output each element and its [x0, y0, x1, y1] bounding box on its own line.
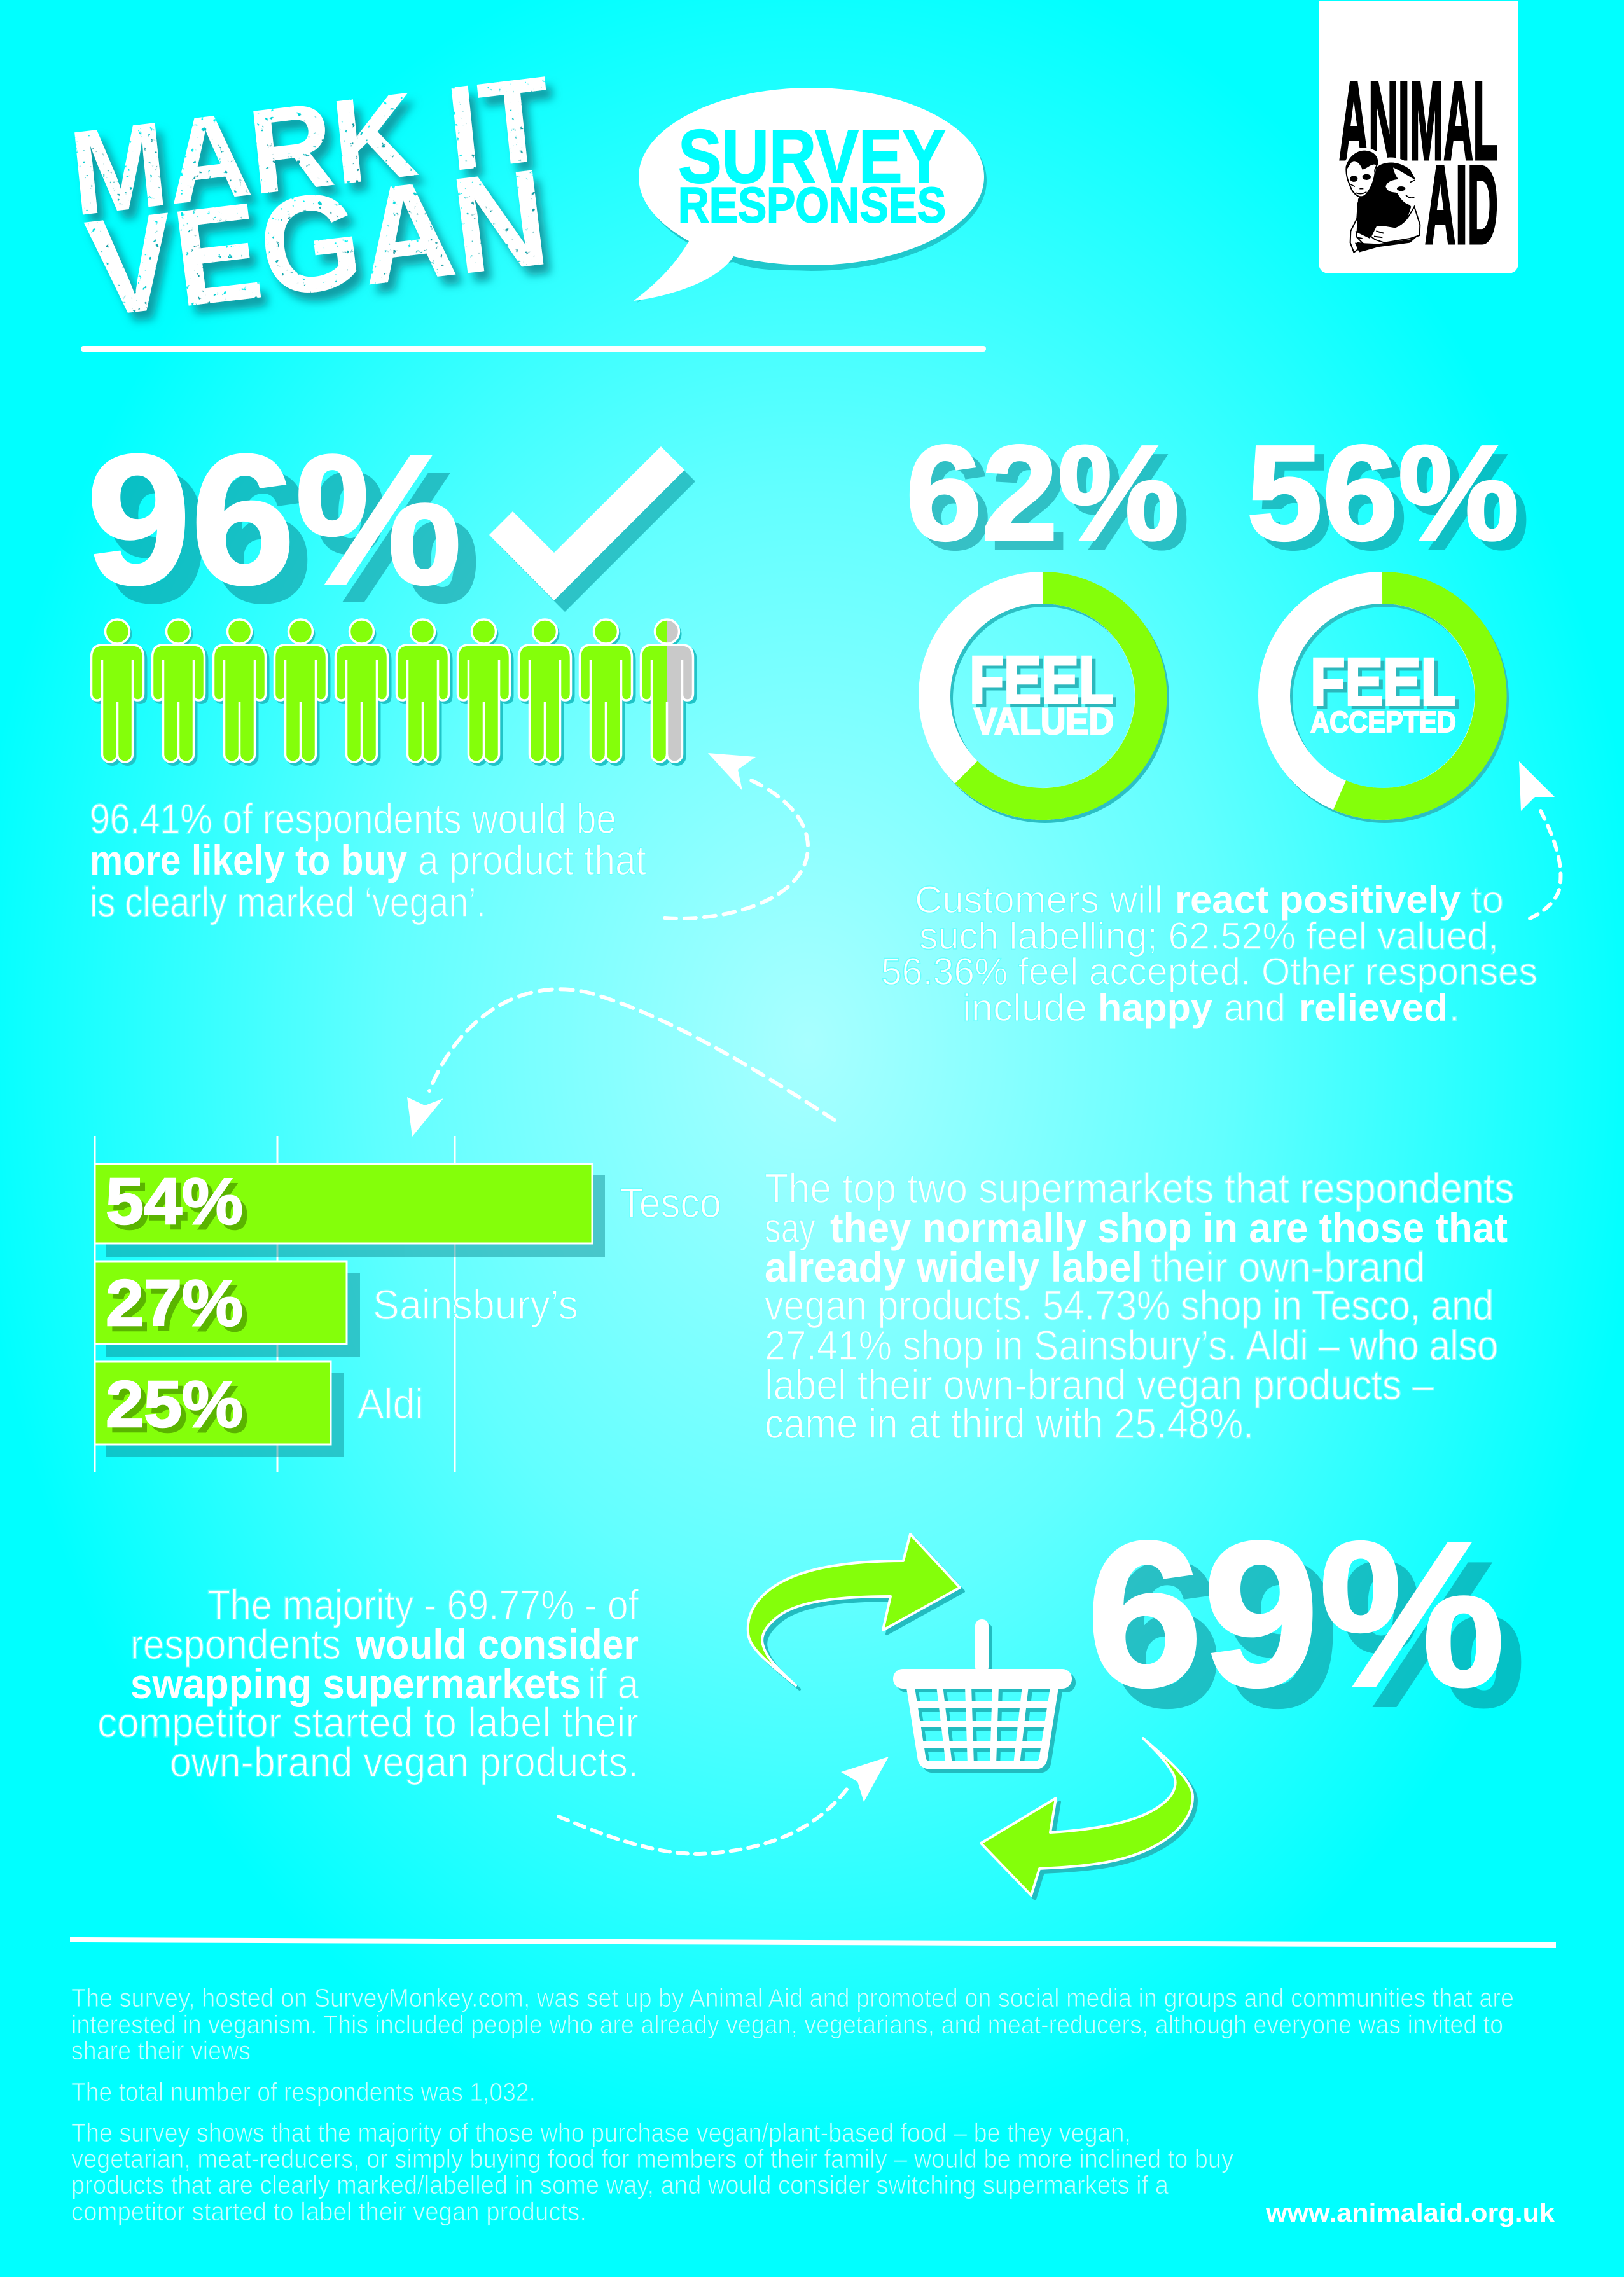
text: would consider swapping: would consider	[355, 1621, 639, 1668]
text: top two supermarkets: vegan products. 54.73% shop in Tesco, and	[765, 1282, 1494, 1329]
icon: tick	[489, 446, 695, 612]
bar labels	[357, 1179, 721, 1427]
donut: feel valued	[934, 588, 1153, 807]
text: would consider swapping: if a	[588, 1660, 639, 1707]
bar: Aldi	[95, 1362, 331, 1444]
footer notes: The survey, hosted on SurveyMonkey.com, was set up by Animal Aid and promoted on social media in groups and communities that are	[71, 1983, 1514, 2012]
footer notes: The survey shows that the majority of those who purchase vegan/plant-based food – be they vegan,	[71, 2118, 1131, 2147]
text: react positively: such labelling; 62.52% feel valued,	[919, 915, 1499, 957]
icon: green arrow up	[748, 1534, 960, 1685]
responses text: RESPONSES	[678, 177, 946, 233]
bar chart: supermarkets	[95, 1136, 721, 1472]
text: react positively	[881, 878, 1537, 1029]
title: Mark It Vegan: VEGAN	[80, 139, 555, 346]
text: react positively: happy	[1098, 986, 1213, 1029]
stat: 69%: 69%	[1086, 1498, 1505, 1729]
text: would consider swapping: own-brand vegan products.	[170, 1738, 639, 1785]
text: more likely to buy: a product that	[418, 836, 646, 883]
text: react positively: 56.36% feel accepted. Other responses	[881, 950, 1537, 993]
text: react positively: .	[1449, 986, 1460, 1029]
text: react positively: include	[962, 986, 1087, 1029]
text: top two supermarkets	[765, 1165, 1514, 1447]
title: Mark It Vegan: MARK IT	[64, 51, 557, 242]
bar labels: Aldi	[357, 1380, 424, 1427]
bar: Sainsbury's: 27%	[106, 1266, 243, 1339]
logo panel: Animal Aid	[1319, 1, 1518, 273]
website url: www.animalaid.org.uk	[1265, 2198, 1555, 2227]
text: top two supermarkets: The top two supermarkets that respondents	[765, 1165, 1514, 1212]
bar: Aldi: 25%	[106, 1367, 243, 1441]
footer notes	[71, 1983, 1514, 2226]
text: would consider swapping	[97, 1581, 639, 1785]
text: top two supermarkets: already widely label	[765, 1243, 1142, 1291]
text: would consider swapping: respondents	[130, 1621, 341, 1668]
text: top two supermarkets: they normally shop in are those that	[830, 1204, 1508, 1251]
icon: shopping basket	[893, 1619, 1072, 1765]
text: AID	[1425, 142, 1498, 266]
arrow: dashed to people	[665, 753, 808, 918]
footer notes: competitor started to label their vegan products.	[71, 2197, 586, 2226]
stat: 56%: 56%	[1247, 417, 1519, 568]
stat: 62%: 62%	[906, 417, 1179, 568]
footer notes: products that are clearly marked/labelled in some way, and would consider switching supermarkets if a	[71, 2170, 1169, 2199]
text: top two supermarkets: came in at third with 25.48%.	[765, 1400, 1254, 1447]
bar labels: Tesco	[620, 1179, 721, 1226]
bar: Tesco: 54%	[106, 1165, 243, 1238]
text: react positively: Customers will	[915, 878, 1163, 921]
footer notes: vegetarian, meat-reducers, or simply buying food for members of their family – would be more inclined to buy	[71, 2144, 1233, 2173]
donut label: FEEL	[1310, 645, 1455, 719]
text: would consider swapping: The majority - 69.77% - of	[207, 1581, 639, 1628]
text: would consider swapping: competitor started to label their	[97, 1699, 639, 1746]
text: more likely to buy: 96.41% of respondents would be	[90, 795, 616, 842]
pictogram: ten people, 96% green	[92, 619, 696, 765]
text: more likely to buy: more likely to buy	[90, 836, 407, 883]
logo icon: monkeys	[1344, 148, 1423, 256]
bar: Sainsbury's	[95, 1261, 347, 1344]
text: more likely to buy	[90, 795, 646, 925]
bar: Tesco	[95, 1164, 592, 1243]
text: react positively: react positively	[1175, 878, 1461, 921]
survey text: SURVEY	[678, 114, 946, 199]
text: react positively: to	[1471, 878, 1504, 921]
text: react positively: relieved	[1299, 986, 1448, 1029]
text: react positively: and	[1224, 986, 1286, 1029]
donut: feel accepted	[1274, 588, 1493, 807]
footer notes: share their views	[71, 2036, 251, 2065]
text: would consider swapping: swapping supermarkets	[130, 1660, 581, 1707]
text: top two supermarkets: say	[765, 1204, 815, 1251]
donut label: FEEL	[969, 643, 1113, 717]
speech bubble: survey responses	[634, 88, 987, 303]
text: top two supermarkets: their own-brand	[1151, 1243, 1425, 1291]
text: more likely to buy: is clearly marked ‘vegan’.	[90, 878, 486, 925]
footer notes: interested in veganism. This included people who are already vegan, vegetarians, and meat-reducers, although everyone was invited to	[71, 2010, 1503, 2039]
stat: 96%: 96%	[87, 417, 462, 623]
donut sublabel: accepted: ACCEPTED	[1310, 705, 1456, 738]
donut sublabel: valued: VALUED	[974, 701, 1114, 742]
text: top two supermarkets: 27.41% shop in Sainsbury’s. Aldi – who also	[765, 1322, 1498, 1369]
text: top two supermarkets: label their own-brand vegan products –	[765, 1361, 1434, 1408]
arrow: dashed to donuts	[1519, 761, 1560, 918]
arrow: dashed to basket	[559, 1757, 889, 1854]
icon: green arrow down	[981, 1738, 1193, 1895]
footer notes: The total number of respondents was 1,032.	[71, 2077, 536, 2107]
bar labels: Sainsbury’s	[373, 1281, 578, 1328]
title: Mark It Vegan	[64, 51, 557, 346]
arrow: dashed to bar chart	[407, 989, 835, 1137]
